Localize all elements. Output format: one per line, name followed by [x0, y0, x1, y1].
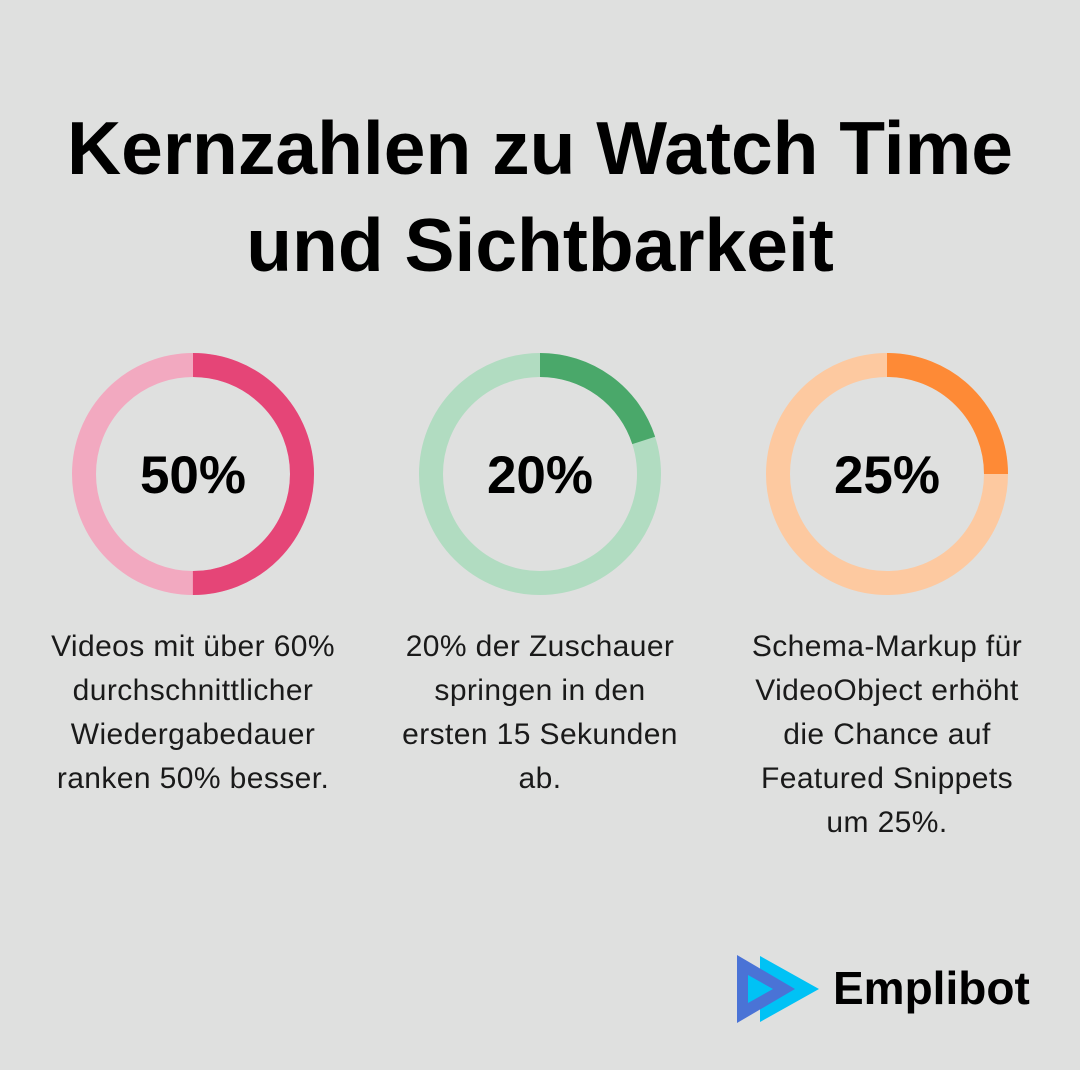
donut: 25% [778, 365, 996, 583]
text: stat 1: Videos mit über 60% [51, 630, 335, 663]
donut: 50% [84, 365, 302, 583]
text: stat 1: Wiedergabedauer [71, 718, 315, 751]
donut: 50%: 50% [140, 446, 246, 505]
text: stat 1 [51, 630, 335, 795]
text: stat 2: springen in den [434, 674, 646, 707]
title: und Sichtbarkeit [246, 203, 834, 287]
text: stat 3: Featured Snippets [761, 762, 1013, 795]
text: stat 3: die Chance auf [783, 718, 991, 751]
text: stat 2: ab. [519, 762, 561, 795]
text: stat 3: VideoObject erhöht [755, 674, 1019, 707]
text: stat 2: 20% der Zuschauer [406, 630, 674, 663]
donut: 25%: 25% [834, 446, 940, 505]
text: stat 1: durchschnittlicher [73, 674, 313, 707]
title [67, 106, 1013, 287]
text: stat 2 [402, 630, 678, 795]
text: stat 3: Schema-Markup für [752, 630, 1022, 663]
donut: 20%: 20% [487, 446, 593, 505]
donut charts [72, 353, 1008, 595]
text: stat 1: ranken 50% besser. [57, 762, 329, 795]
text: stat 2: ersten 15 Sekunden [402, 718, 678, 751]
icon: play triangles [737, 955, 819, 1023]
text: stat 3: um 25%. [826, 806, 948, 839]
text: stat 3 [752, 630, 1022, 839]
logo [737, 955, 1030, 1023]
donut: 20% [431, 365, 649, 583]
title: Kernzahlen zu Watch Time [67, 106, 1013, 190]
logo text: Emplibot [833, 962, 1030, 1014]
